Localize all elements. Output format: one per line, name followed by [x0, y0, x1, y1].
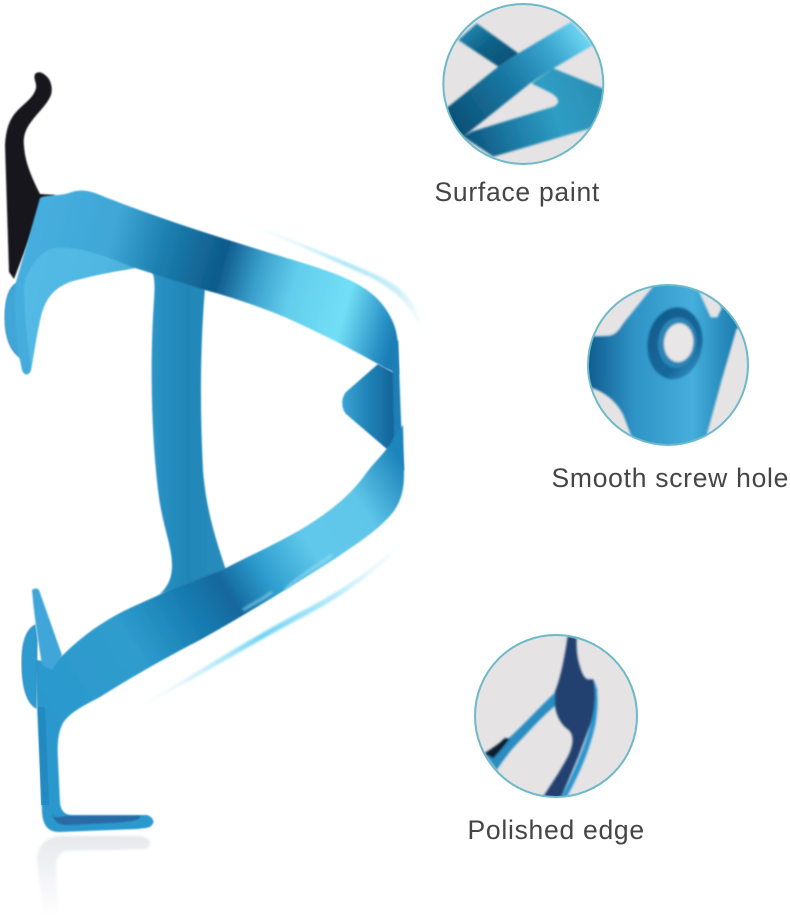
foot reflection — [37, 836, 150, 917]
lower washer — [22, 625, 37, 708]
lower band with foot — [36, 425, 404, 832]
label: polished edge: Polished edge — [468, 815, 645, 845]
detail: polished edge — [468, 635, 645, 845]
bottle cage illustration — [5, 72, 425, 917]
circle: polished edge closeup — [475, 635, 637, 800]
label: surface paint: Surface paint — [434, 177, 600, 207]
scuff marks on lower band — [243, 555, 332, 610]
motion swoosh lower — [130, 530, 412, 712]
detail: smooth screw hole — [552, 280, 789, 493]
top band with left arm — [15, 191, 399, 375]
detail: surface paint — [434, 4, 607, 207]
foot shading — [52, 814, 140, 825]
vertical strut — [150, 268, 226, 594]
label: smooth screw hole: Smooth screw hole — [552, 463, 789, 493]
black clip — [5, 72, 56, 279]
rear screw washer upper — [5, 283, 34, 358]
circle: screw hole closeup — [580, 280, 753, 447]
stem shading — [38, 707, 49, 805]
tab at right side — [342, 364, 398, 450]
right side edge — [392, 340, 404, 480]
circle: surface paint closeup — [440, 4, 607, 164]
lower fin — [32, 588, 62, 670]
motion swoosh upper — [225, 215, 425, 345]
inner highlight on arm — [24, 248, 135, 368]
